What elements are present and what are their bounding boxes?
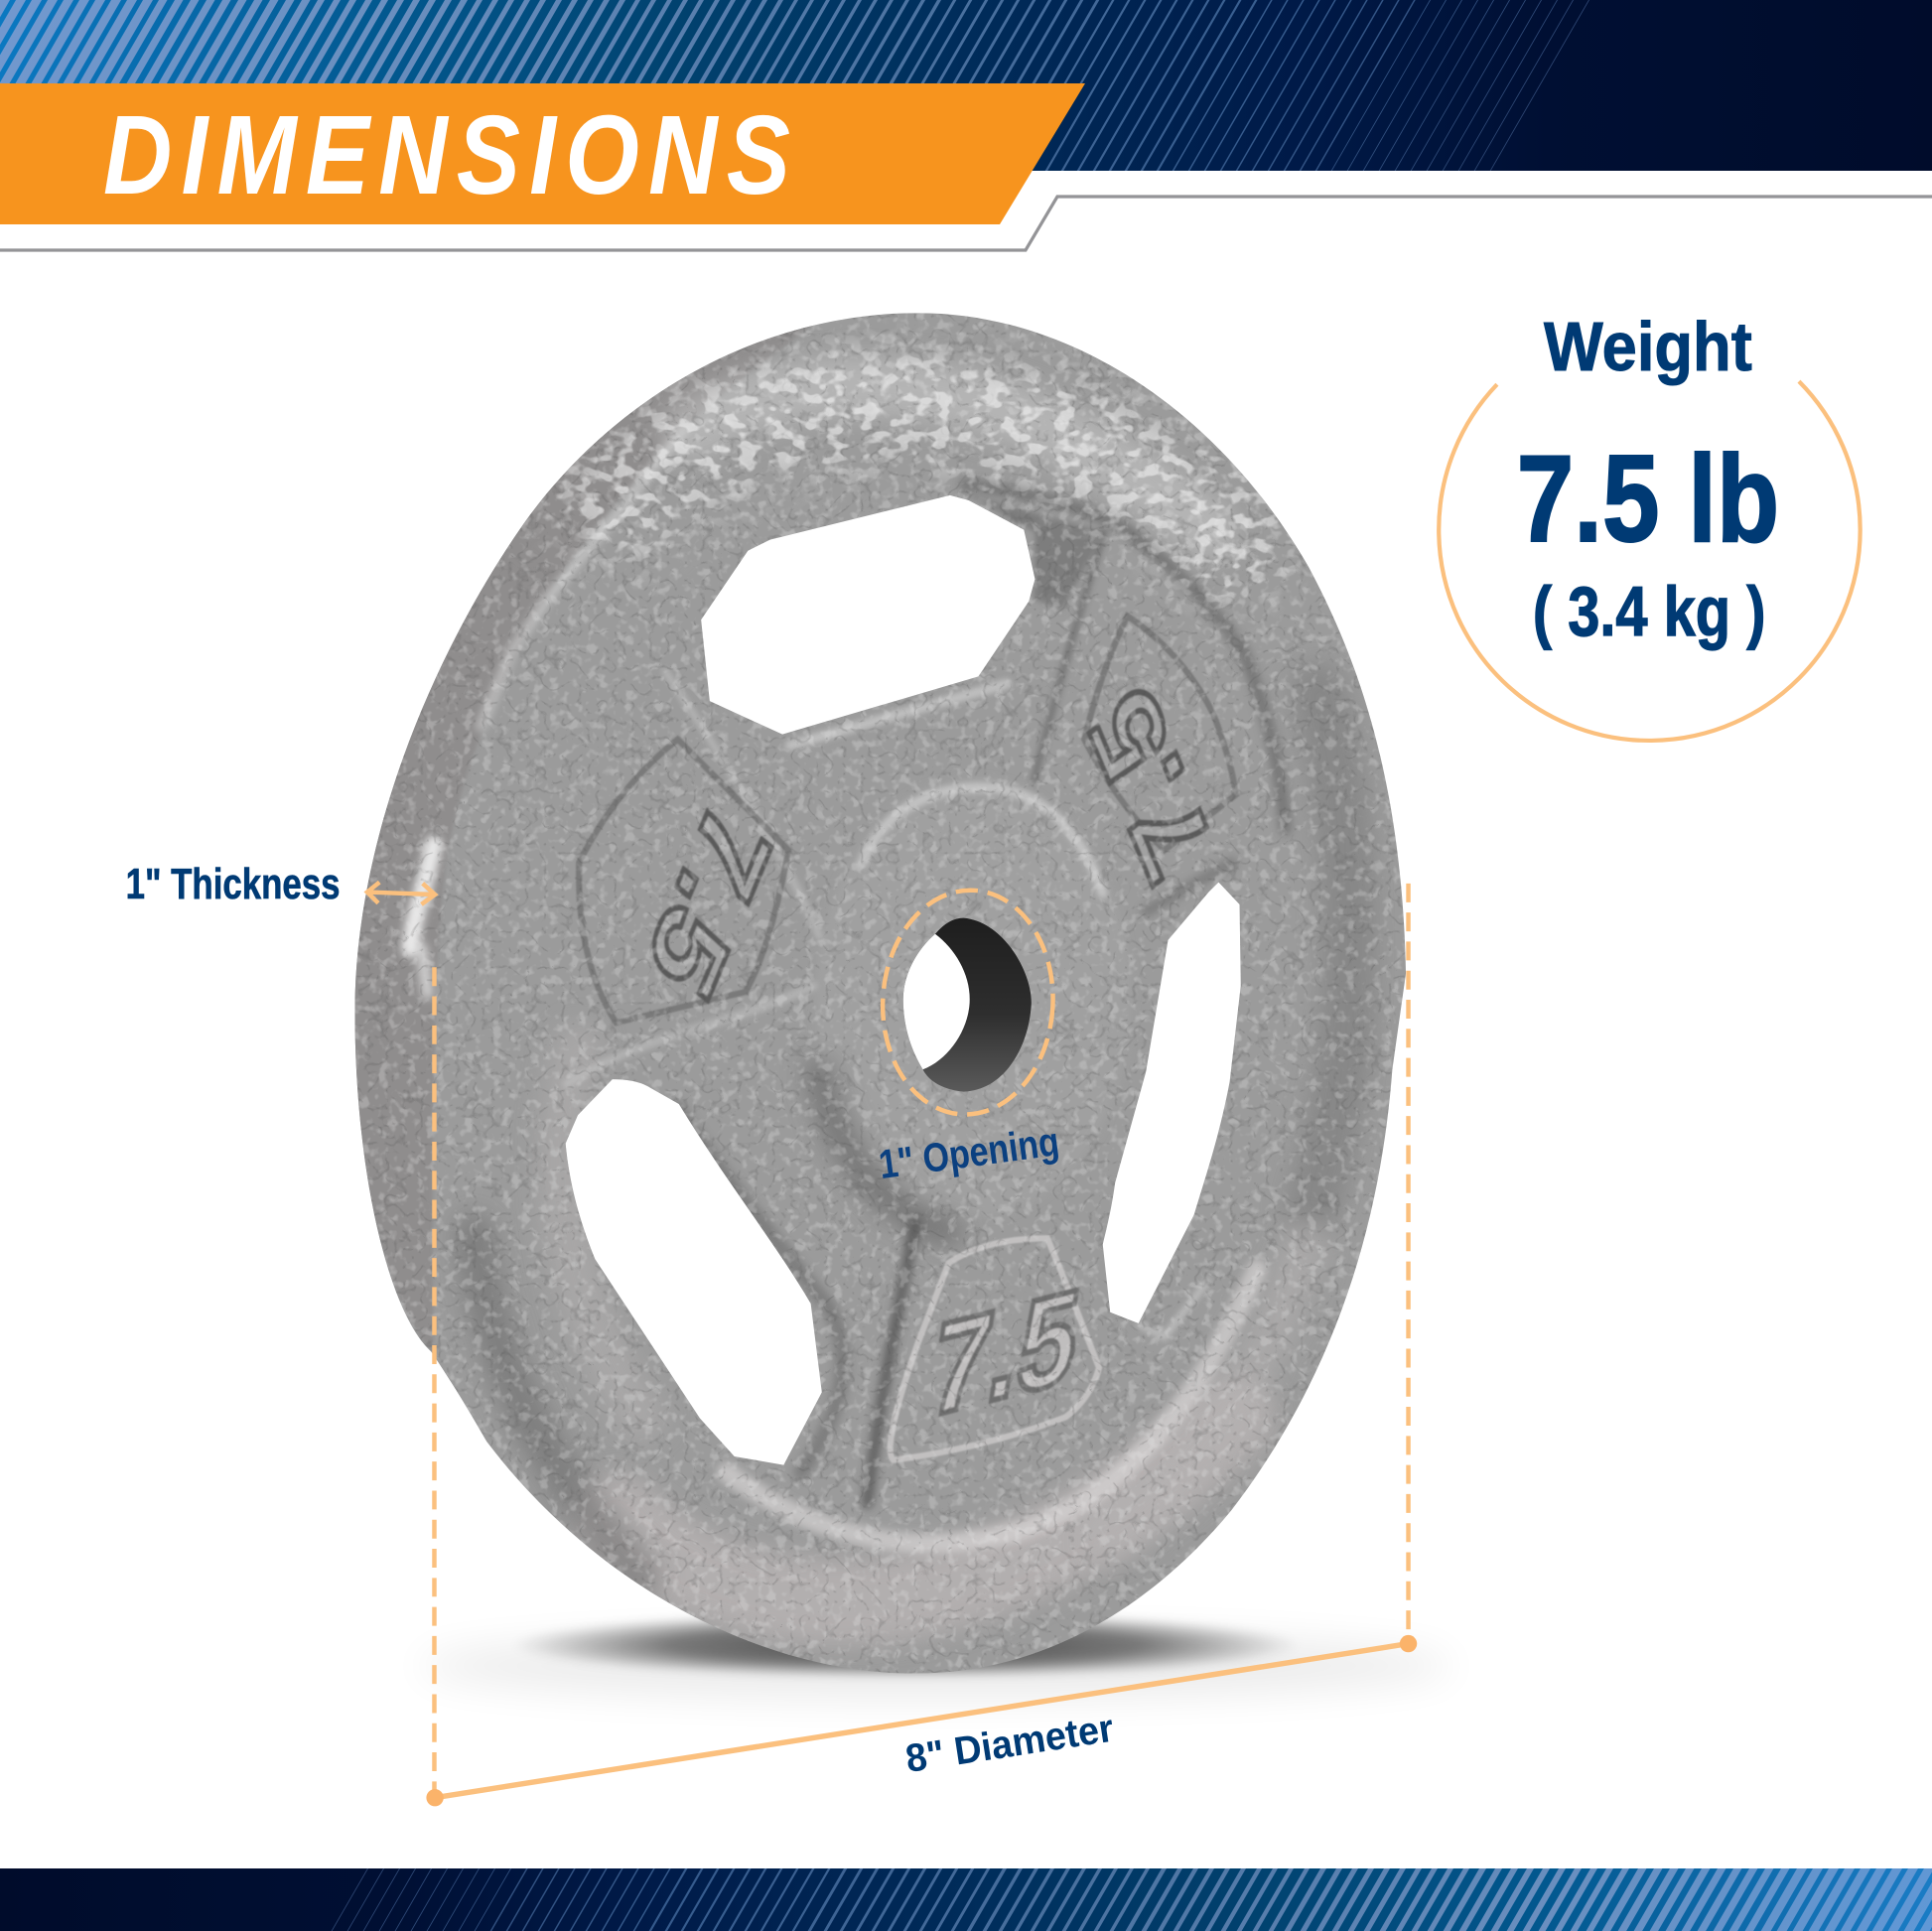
plate side thickness (352, 314, 826, 1355)
diameter dimension line (426, 884, 1417, 1806)
pounds value: 7.5 lb (1517, 431, 1779, 568)
bottom weight tag: 7.5 (922, 1259, 1088, 1446)
title: DIMENSIONS (103, 93, 790, 218)
weight callout (1439, 308, 1861, 741)
callout ring (1439, 381, 1861, 741)
cast surface texture (333, 296, 1430, 1688)
right weight tag: 7.5 (1067, 663, 1232, 906)
diameter label: 8" Diameter (902, 1707, 1117, 1781)
opening dashed ring (877, 886, 1058, 1119)
bottom footer band (0, 1868, 1932, 1931)
weight plate (333, 296, 1430, 1688)
bottom weight tag (891, 1238, 1099, 1460)
center bore (903, 918, 1032, 1092)
main artwork scaled group (126, 296, 1861, 1806)
rim tonal shading (475, 386, 1350, 1602)
thickness arrow (367, 883, 435, 904)
kilograms value: ( 3.4 kg ) (1533, 572, 1765, 650)
weight heading: Weight (1544, 308, 1752, 385)
hub and spoke shading (567, 532, 1232, 1503)
top hole inner wall (973, 496, 1101, 610)
plate edge ridge and glare (410, 426, 685, 993)
left weight tag (579, 740, 791, 1023)
header outline rule (0, 197, 1932, 250)
left weight tag: 7.5 (627, 780, 791, 1023)
opening label: 1" Opening (876, 1118, 1061, 1187)
plate floor shadow (419, 1611, 1453, 1698)
orange title banner (0, 83, 1085, 224)
top header band (0, 0, 1932, 171)
thickness label: 1" Thickness (126, 861, 341, 908)
